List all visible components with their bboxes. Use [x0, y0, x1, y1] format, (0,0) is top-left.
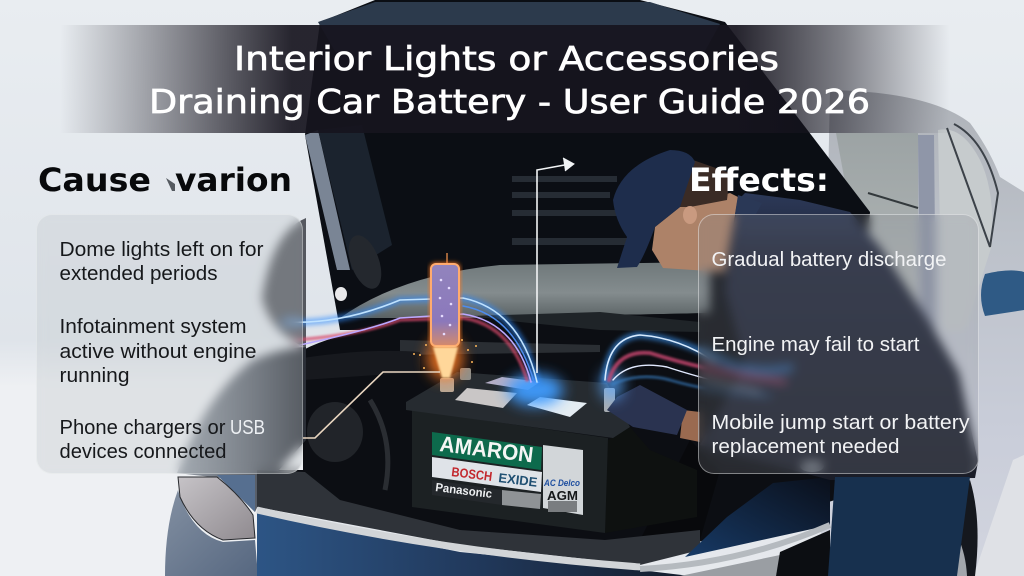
- car body right side: [820, 90, 1024, 576]
- effect text: jump start: [712, 412, 970, 458]
- grey shelf above chrome: [257, 470, 700, 565]
- cause text: dome lights: extended periods: [60, 263, 218, 285]
- bosch text: BOSCH: [451, 464, 493, 484]
- dark brand label: [432, 480, 502, 505]
- right lamp: [680, 555, 780, 576]
- green label: [432, 432, 542, 470]
- dark blob of hood edge behind left panel: [262, 218, 306, 348]
- chrome strip: [257, 510, 640, 567]
- cause text: dome lights: [60, 239, 264, 285]
- open hood underside: [305, 0, 870, 330]
- left fender and headlight: [165, 347, 306, 576]
- cloth highlight: [800, 460, 824, 472]
- cause text: infotainment: [60, 316, 256, 387]
- heading: causes: [38, 161, 292, 199]
- barcode: [548, 501, 577, 512]
- fender blue strip: [217, 475, 255, 512]
- arrow to hood: [537, 158, 574, 373]
- cause text: infotainment: Infotainment system: [60, 316, 246, 338]
- trousers: [828, 477, 970, 576]
- glowing phone device: [413, 253, 477, 378]
- glove: [607, 385, 687, 435]
- heading: causes: varion: [175, 161, 292, 199]
- title: Draining Car Battery - User Guide 2026: [149, 82, 870, 121]
- terminals: [440, 378, 454, 392]
- battery top: [406, 372, 630, 438]
- mechanic: [607, 150, 978, 576]
- effect text: discharge: Gradual battery discharge: [712, 249, 946, 271]
- engine bay: [256, 312, 835, 560]
- glow: [507, 374, 563, 406]
- forearm: [680, 410, 700, 442]
- effect text: fail to start: Engine may fail to start: [712, 334, 920, 356]
- windshield right part: [836, 133, 918, 320]
- cause text: infotainment: active without engine: [60, 341, 256, 363]
- agm text: AGM: [547, 488, 578, 503]
- windshield seen below hood: [340, 262, 710, 318]
- side mirror: [981, 270, 1024, 316]
- right hood wedge: [685, 477, 830, 557]
- energy streams: [285, 298, 790, 406]
- heading: causes: Cause: [38, 161, 151, 199]
- ac delco text: AC Delco: [543, 478, 580, 488]
- collar: [735, 195, 762, 214]
- effect text: jump start: replacement needed: [712, 436, 900, 458]
- grey sub label: [502, 490, 541, 509]
- exide text: EXIDE: [498, 470, 538, 490]
- top label back: [485, 377, 540, 390]
- hair: [680, 160, 730, 207]
- battery side: [605, 427, 697, 533]
- top label left: [455, 388, 517, 408]
- title band: [60, 25, 950, 133]
- title: Interior Lights or Accessories: [234, 39, 779, 78]
- cause text: phone chargers: devices connected: [60, 441, 226, 463]
- cause text: dome lights: Dome lights left on for: [60, 239, 264, 261]
- ear: [683, 206, 697, 224]
- panasonic text: Panasonic: [435, 480, 493, 501]
- front wheel: [948, 480, 978, 576]
- cause text: phone chargers: USB: [230, 417, 265, 439]
- spec label: [543, 445, 583, 515]
- amaron text: AMARON: [438, 431, 535, 467]
- top label right: [527, 397, 587, 417]
- panel: causes: [36, 214, 303, 474]
- torso: [700, 193, 978, 480]
- cause leader line: [303, 372, 440, 438]
- effect text: jump start: Mobile jump start or battery: [712, 412, 970, 434]
- battery front: [412, 410, 608, 533]
- front bumper with chrome strip: [257, 470, 830, 576]
- car battery: [406, 368, 697, 533]
- white brand label: [432, 457, 542, 492]
- body corner under headlight: [165, 490, 258, 576]
- face: [652, 193, 738, 272]
- cap: [613, 150, 695, 268]
- heading: effects: Effects:: [689, 161, 829, 199]
- cause text: infotainment: running: [60, 365, 129, 387]
- headlight: [178, 477, 255, 540]
- cause text: phone chargers: Phone chargers or: [60, 417, 226, 439]
- panel: effects: [698, 214, 979, 474]
- title: [149, 39, 870, 121]
- cause text: phone chargers: [60, 417, 265, 463]
- side window: [938, 129, 992, 330]
- blue bumper: [257, 512, 690, 576]
